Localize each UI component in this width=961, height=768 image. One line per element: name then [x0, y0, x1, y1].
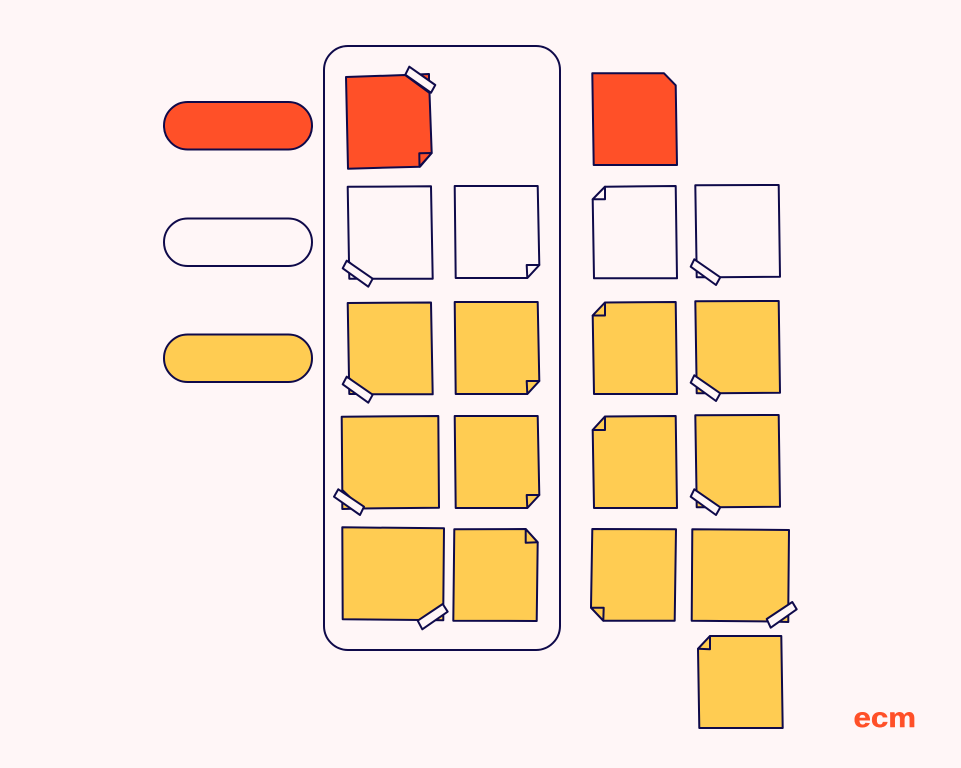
note: yellow wide taped bottom right: [342, 527, 448, 629]
logo: ecm: ecm: [854, 702, 916, 733]
note: yellow folded top left row four: [593, 416, 677, 508]
note: yellow folded bottom right: [455, 302, 539, 394]
panel: rounded column frame: [324, 46, 560, 650]
sticky notes outside panel: [591, 73, 797, 728]
note: orange clipped corner: [592, 73, 677, 165]
note: orange taped top right: [346, 67, 435, 169]
note: white taped bottom left: [343, 186, 433, 287]
note: yellow folded bottom left: [591, 529, 676, 621]
pill: white: [164, 218, 312, 266]
note: white folded top left: [593, 186, 677, 278]
note: white folded bottom right: [455, 186, 539, 278]
pill: yellow: [164, 334, 312, 382]
note: yellow folded bottom right row four: [455, 416, 539, 508]
sticky notes inside panel: [334, 67, 539, 629]
note: yellow taped bottom left: [343, 302, 433, 403]
note: yellow wide taped bottom left: [334, 416, 439, 515]
note: yellow folded top left row three: [593, 302, 677, 394]
legend pills: [164, 102, 312, 382]
note: yellow folded top right: [453, 529, 538, 621]
note: white taped bottom left: [691, 185, 780, 285]
pill: orange: [164, 102, 312, 150]
note: yellow wide taped bottom right: [692, 529, 797, 628]
note: yellow taped bottom left row three: [691, 301, 780, 401]
note: yellow taped bottom left row four: [691, 415, 780, 515]
note: yellow folded top left bottom row: [698, 636, 783, 728]
